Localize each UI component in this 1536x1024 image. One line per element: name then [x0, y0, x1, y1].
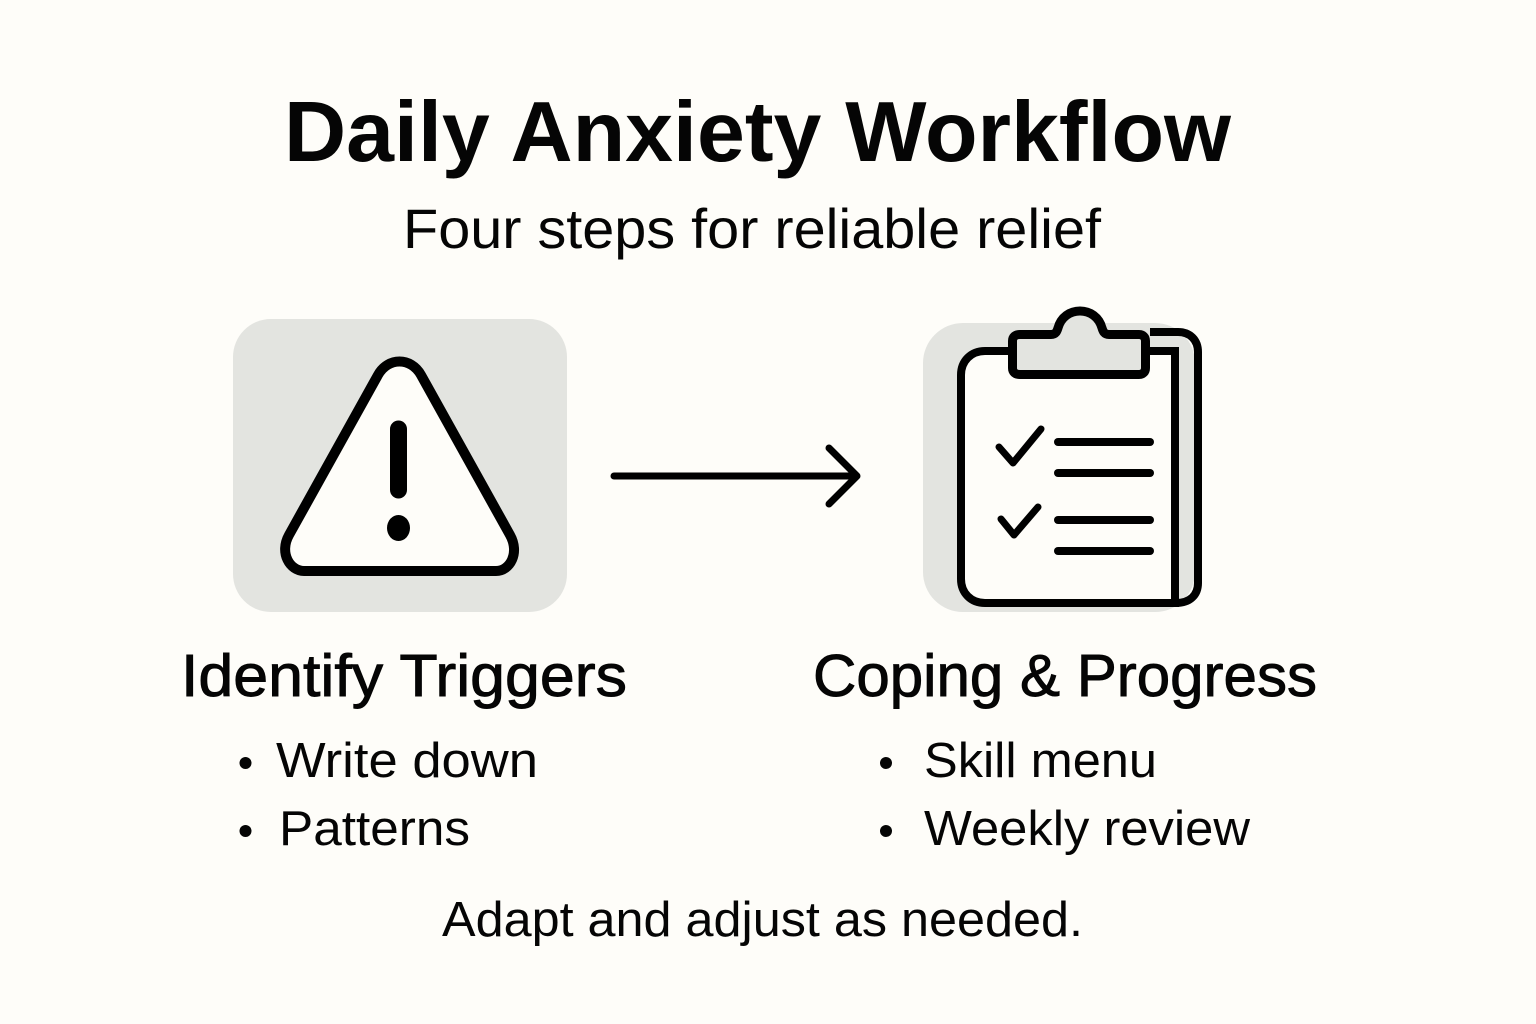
icon: warning triangle	[233, 319, 567, 612]
list: coping and progress bullets: Skill menu	[924, 734, 1157, 788]
list: coping and progress bullets: Weekly review	[924, 802, 1251, 856]
icon: clipboard checklist	[923, 311, 1198, 612]
list: coping and progress bullets	[880, 734, 1251, 856]
subtitle: Four steps for reliable relief	[403, 197, 1101, 260]
list: identify triggers bullets: Patterns	[279, 802, 470, 856]
title: Daily Anxiety Workflow	[284, 85, 1232, 180]
heading: identify triggers: Identify Triggers	[181, 643, 627, 709]
list: identify triggers bullets	[240, 734, 538, 856]
arrow	[614, 448, 857, 504]
list: identify triggers bullets: Write down	[276, 734, 538, 788]
footer note: Adapt and adjust as needed.	[442, 893, 1083, 947]
heading: coping and progress: Coping & Progress	[813, 643, 1317, 709]
